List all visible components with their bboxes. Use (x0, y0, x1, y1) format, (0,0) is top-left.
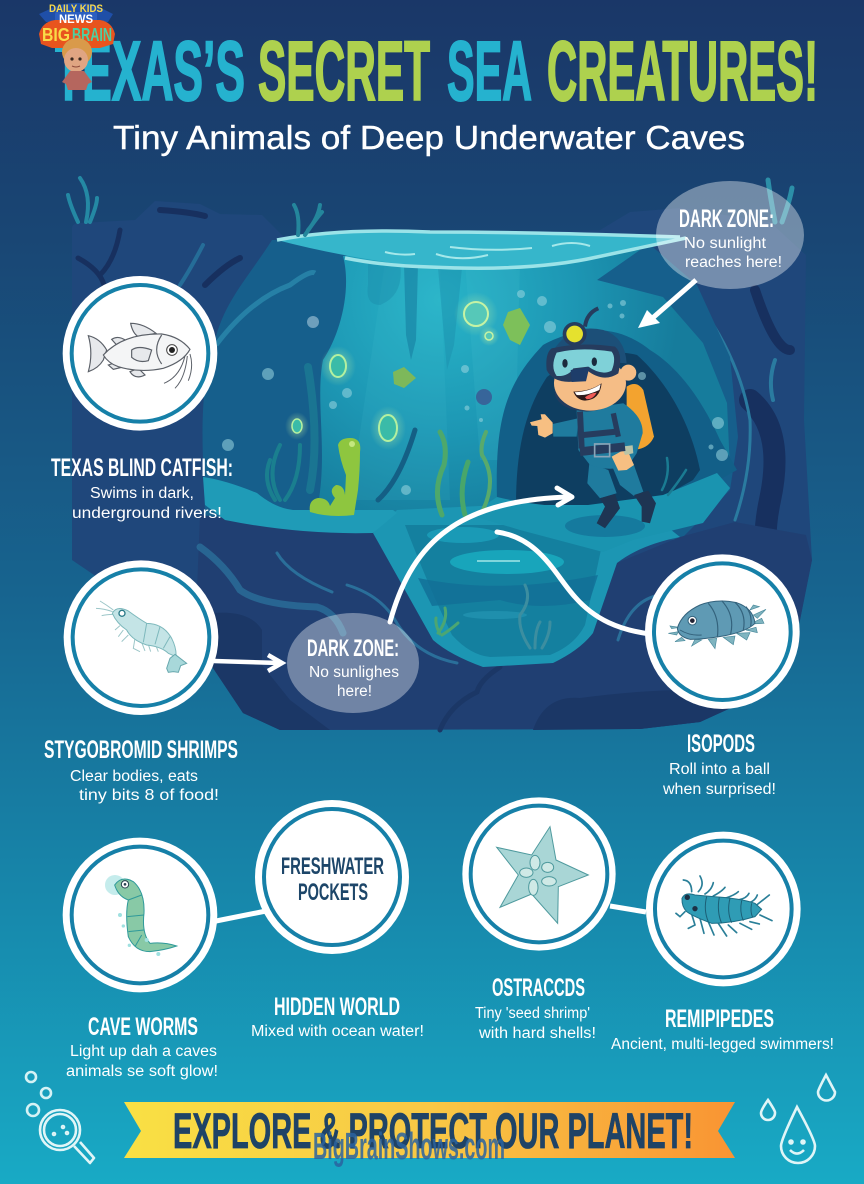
description: remipedes: Ancient, multi-legged swimmers! (611, 1036, 834, 1053)
heading: shrimps: STYGOBROMID SHRIMPS (44, 736, 238, 764)
description: catfish (72, 485, 222, 522)
boots (597, 491, 656, 528)
description: cave worms (66, 1043, 218, 1080)
title: SEA (447, 24, 532, 118)
description: catfish: Swims in dark, (90, 485, 194, 502)
panel: hidden world (251, 800, 424, 1040)
panel: isopods (645, 554, 800, 798)
callout: dark zone top: DARK ZONE: (679, 205, 774, 233)
cave scene (72, 201, 812, 730)
light rays (350, 262, 450, 500)
logo: Daily Kids News with Big Brain (39, 3, 115, 90)
heading: cave worms: CAVE WORMS (88, 1013, 198, 1041)
badge: freshwater pockets: FRESHWATER (281, 853, 384, 880)
badge: freshwater pockets: POCKETS (298, 879, 368, 906)
icon: catfish (63, 276, 217, 431)
arrow to dark zone callout (214, 655, 282, 671)
callout: dark zone lower: here! (337, 683, 372, 700)
cave opening deep layer (202, 236, 738, 540)
icon: remipede (646, 832, 801, 986)
pit (373, 505, 680, 667)
callout: dark zone top (656, 181, 804, 289)
diver (530, 308, 656, 528)
logo: Daily Kids News with Big Brain: DAILY KIDS (49, 3, 103, 15)
lower rock (195, 515, 812, 730)
description: isopods (662, 761, 776, 798)
head (553, 370, 627, 412)
icon: water drops (761, 1075, 835, 1163)
subtitle: Tiny Animals of Deep Underwater Caves (113, 119, 745, 156)
description: cave worms: Light up dah a caves (70, 1043, 217, 1060)
title: SECRET (258, 24, 430, 118)
description: ostracods (475, 1005, 596, 1042)
heading: isopods: ISOPODS (687, 730, 755, 758)
heading: ostracods: OSTRACCDS (492, 974, 585, 1002)
pit plants (436, 585, 550, 648)
teal water (318, 240, 730, 530)
icon: star-shaped ostracod (462, 797, 616, 951)
callout: dark zone lower: No sunlighes (309, 664, 399, 681)
hood (550, 329, 627, 363)
callout: dark zone lower (287, 613, 419, 713)
panel: cave worms (63, 838, 218, 1080)
icon: magnifying glass (40, 1110, 94, 1163)
description: shrimps: Clear bodies, eats (70, 768, 198, 785)
water surface (277, 231, 686, 269)
plants above cave (68, 178, 792, 235)
icon: cave worm (63, 838, 217, 992)
callout: dark zone top: No sunlight (684, 235, 767, 252)
description: catfish: underground rivers! (72, 505, 222, 522)
glowing microbes (285, 292, 530, 450)
heading: hidden world: HIDDEN WORLD (274, 993, 400, 1021)
left ledge (203, 477, 397, 533)
description: ostracods: Tiny 'seed shrimp' (475, 1005, 590, 1022)
harness (580, 412, 625, 452)
arrow to dark zone (638, 280, 696, 328)
panel: stygobromid shrimps (44, 560, 282, 804)
lower rock streaks (200, 547, 660, 730)
right ledge (470, 473, 730, 552)
watermark: BigBrainShows.com (313, 1126, 505, 1168)
arrow behind isopod (497, 532, 650, 634)
icon: isopod (645, 554, 800, 709)
badge: freshwater pockets (255, 800, 409, 954)
seaweed (267, 367, 686, 515)
title (55, 24, 818, 118)
description: isopods: when surprised! (662, 781, 776, 798)
description: ostracods: with hard shells! (478, 1025, 596, 1042)
teal band on rock (216, 272, 315, 345)
title: TEXAS’S (55, 24, 245, 118)
logo: Daily Kids News with Big Brain: BRAIN (72, 25, 112, 45)
logo: Daily Kids News with Big Brain: BIG (42, 25, 70, 45)
description: isopods: Roll into a ball (669, 761, 770, 778)
panel: remipedes (611, 832, 834, 1053)
diver cave (497, 330, 737, 510)
icon: shrimp (64, 560, 218, 715)
hand (530, 414, 553, 438)
panel: ostracods (462, 797, 616, 1042)
rock streaks (78, 210, 790, 610)
outer rock (72, 201, 812, 730)
dark patches (213, 613, 770, 730)
curved arrow to diver (390, 488, 572, 622)
description: shrimps: tiny bits 8 of food! (79, 787, 219, 804)
lamp (585, 308, 598, 327)
callout: dark zone top: reaches here! (685, 254, 782, 271)
wetsuit body (577, 403, 643, 469)
panel: texas blind catfish (51, 276, 233, 522)
icon: big brain character (62, 38, 92, 90)
mask (546, 345, 620, 382)
stalactites (368, 262, 462, 370)
description: cave worms: animals se soft glow! (66, 1063, 218, 1080)
description: shrimps (70, 768, 219, 804)
description: hidden world: Mixed with ocean water! (251, 1023, 424, 1040)
heading: remipedes: REMIPIPEDES (665, 1005, 774, 1033)
heading: catfish: TEXAS BLIND CATFISH: (51, 454, 233, 482)
pointing arm (553, 418, 578, 437)
connector: ostracod to remipede (610, 906, 646, 912)
green tube creature (310, 438, 360, 516)
callout: dark zone lower: DARK ZONE: (307, 635, 399, 662)
smile (573, 383, 602, 401)
bubbles (222, 290, 728, 495)
icon: bubbles (26, 1072, 51, 1116)
connector: worm to freshwater (216, 911, 266, 921)
logo: Daily Kids News with Big Brain: NEWS (59, 12, 93, 26)
air tank (627, 384, 654, 449)
legs (587, 463, 643, 498)
